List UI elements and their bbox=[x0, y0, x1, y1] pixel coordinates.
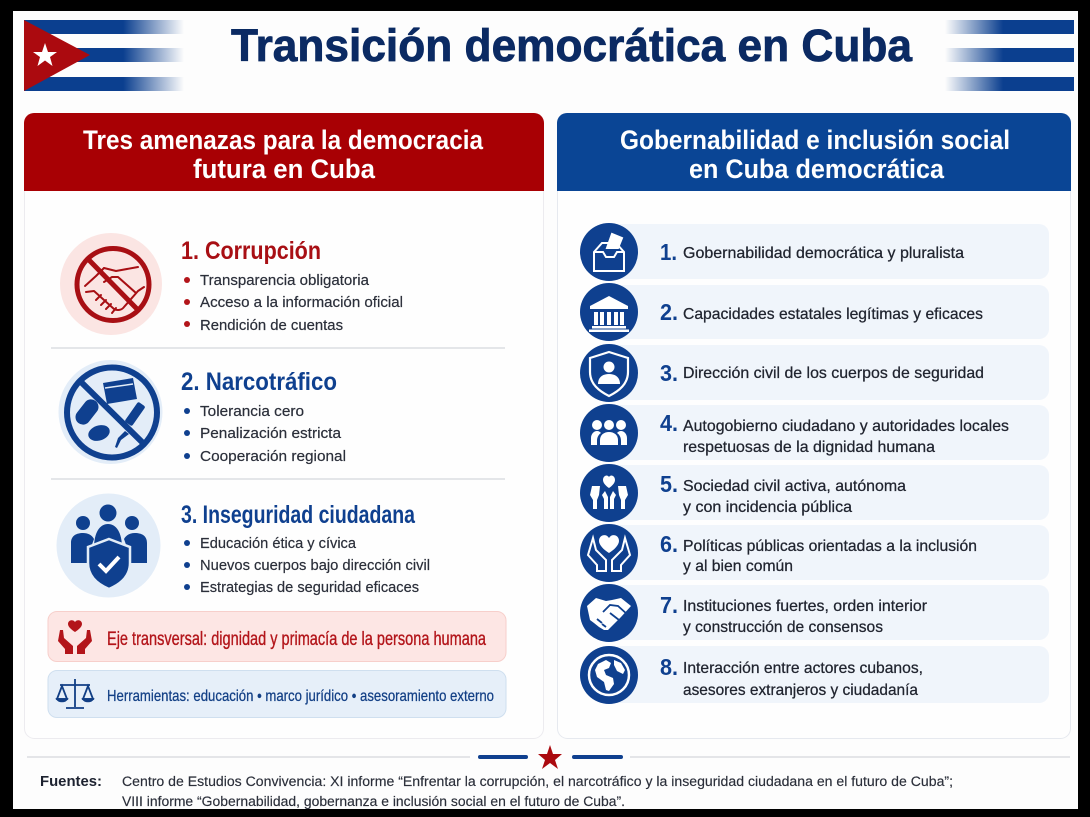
row 5: Sociedad civil activa, autónoma bbox=[683, 478, 906, 495]
row 1: Gobernabilidad democrática y pluralista bbox=[683, 245, 964, 262]
icon: globe bbox=[589, 655, 629, 695]
panel header: gobernabilidad: Gobernabilidad e inclusión social bbox=[620, 125, 1010, 155]
flag: Cuba left bbox=[24, 20, 184, 91]
row 5 bbox=[580, 464, 1049, 522]
row 1 bbox=[580, 223, 1049, 281]
row 7: y construcción de consensos bbox=[683, 619, 883, 636]
item: corrupción bbox=[181, 237, 403, 334]
row 7: Instituciones fuertes, orden interior bbox=[683, 598, 928, 615]
item: corrupción: 1. Corrupción bbox=[181, 237, 321, 265]
item: narcotráfico bbox=[181, 368, 346, 465]
item: narcotráfico: Penalización estricta bbox=[200, 425, 342, 442]
icon: shield person bbox=[590, 352, 628, 396]
item: inseguridad ciudadana: Estrategias de seguridad eficaces bbox=[200, 579, 419, 596]
callout: eje transversal: Eje transversal: dignidad y primacía de la persona humana bbox=[107, 629, 486, 650]
sources: VIII informe “Gobernabilidad, gobernanza e inclusión social en el futuro de Cuba”. bbox=[122, 794, 625, 809]
row 6 bbox=[580, 524, 1049, 582]
row 3 bbox=[580, 344, 1049, 402]
row 2: 2. bbox=[660, 299, 678, 325]
title: Transición democrática en Cuba bbox=[231, 20, 913, 71]
icon: institution bbox=[589, 296, 629, 332]
footer divider with star bbox=[27, 745, 1070, 769]
icon: raised hands bbox=[590, 476, 628, 509]
row 5: 5. bbox=[660, 471, 678, 497]
row 2: Capacidades estatales legítimas y eficaces bbox=[683, 306, 983, 323]
icon: hands holding heart bbox=[588, 535, 630, 571]
row 8 bbox=[580, 646, 1049, 704]
row 8: asesores extranjeros y ciudadanía bbox=[683, 682, 918, 699]
row 5: y con incidencia pública bbox=[683, 499, 852, 516]
icon: people group bbox=[591, 420, 627, 445]
row 7: 7. bbox=[660, 592, 678, 618]
row 8: Interacción entre actores cubanos, bbox=[683, 660, 923, 677]
callout: eje transversal bbox=[48, 612, 506, 662]
row 3: 3. bbox=[660, 360, 678, 386]
row 6: Políticas públicas orientadas a la inclusión bbox=[683, 538, 977, 555]
panel header: tres amenazas: futura en Cuba bbox=[193, 154, 376, 184]
icon: handshake bbox=[587, 598, 631, 630]
row 3: Dirección civil de los cuerpos de seguridad bbox=[683, 365, 984, 382]
row 4: respetuosas de la dignidad humana bbox=[683, 439, 935, 456]
row 4: Autogobierno ciudadano y autoridades locales bbox=[683, 418, 1009, 435]
panel: gobernabilidad bbox=[557, 113, 1071, 738]
sources bbox=[40, 774, 953, 809]
callout: herramientas: Herramientas: educación • marco jurídico • asesoramiento externo bbox=[107, 688, 494, 705]
item: corrupción: Transparencia obligatoria bbox=[200, 272, 370, 289]
sources: Centro de Estudios Convivencia: XI informe “Enfrentar la corrupción, el narcotráfico y la inseguridad ciudadana en el futuro de Cuba”; bbox=[122, 774, 953, 789]
panel header: tres amenazas: Tres amenazas para la democracia bbox=[83, 125, 484, 155]
panel: tres amenazas bbox=[24, 113, 544, 738]
panel header: tres amenazas bbox=[24, 113, 544, 191]
item: narcotráfico: Cooperación regional bbox=[200, 448, 346, 465]
icon: inseguridad ciudadana bbox=[56, 494, 160, 598]
icon: narcotráfico bbox=[58, 360, 162, 464]
row 6: y al bien común bbox=[683, 558, 793, 575]
sources: Fuentes: bbox=[40, 774, 102, 790]
item: narcotráfico: 2. Narcotráfico bbox=[181, 368, 337, 396]
flag stripes right bbox=[945, 20, 1074, 91]
icon: corrupción bbox=[60, 233, 162, 335]
icon: scales bbox=[57, 679, 93, 708]
panel header: gobernabilidad: en Cuba democrática bbox=[689, 154, 945, 184]
row 2 bbox=[580, 283, 1049, 341]
item: narcotráfico: Tolerancia cero bbox=[200, 403, 304, 420]
row 8: 8. bbox=[660, 654, 678, 680]
item: inseguridad ciudadana: Educación ética y cívica bbox=[200, 535, 357, 552]
item: corrupción: Acceso a la información oficial bbox=[200, 294, 403, 311]
row 7 bbox=[580, 584, 1049, 642]
item: corrupción: Rendición de cuentas bbox=[200, 317, 343, 334]
item: inseguridad ciudadana: Nuevos cuerpos bajo dirección civil bbox=[200, 557, 430, 574]
item: inseguridad ciudadana bbox=[181, 501, 430, 596]
panel header: gobernabilidad bbox=[557, 113, 1071, 191]
row 6: 6. bbox=[660, 531, 678, 557]
row 4 bbox=[580, 404, 1049, 462]
icon: ballot box bbox=[594, 234, 624, 271]
row 1: 1. bbox=[660, 239, 677, 265]
callout: herramientas bbox=[48, 670, 506, 718]
item: inseguridad ciudadana: 3. Inseguridad ciudadana bbox=[181, 501, 416, 529]
row 4: 4. bbox=[660, 410, 678, 436]
icon: hands and heart bbox=[58, 620, 92, 654]
